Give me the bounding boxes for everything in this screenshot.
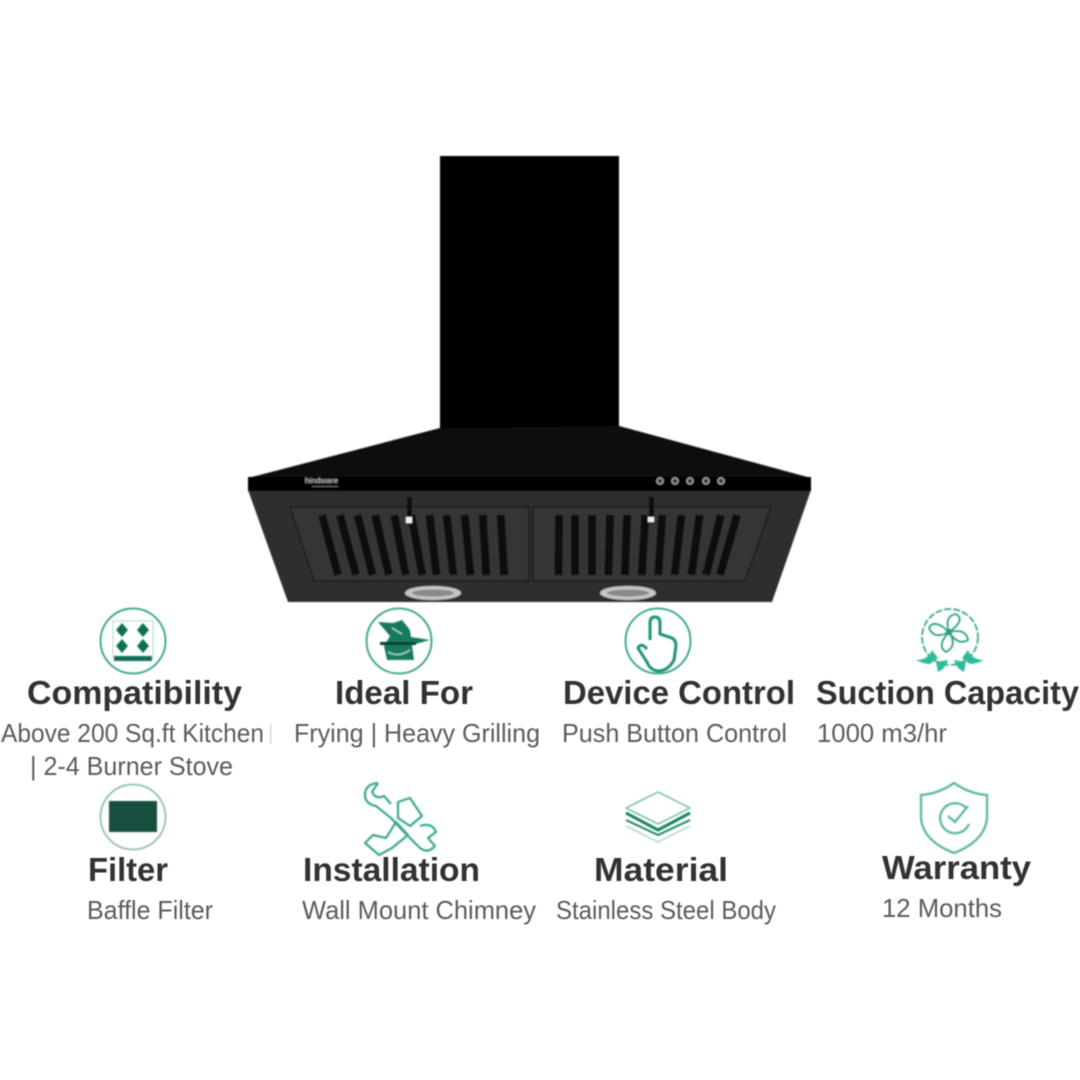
- filter handles: [406, 497, 654, 523]
- control buttons: [657, 478, 724, 484]
- control band: [248, 477, 811, 491]
- text: filter value: Baffle Filter: [87, 895, 213, 925]
- canopy: [248, 426, 811, 478]
- brand logo: hindware: [305, 478, 338, 485]
- heading: warranty: Warranty: [882, 849, 1032, 886]
- text: warranty value: 12 Months: [882, 893, 1002, 923]
- icon: installation tools: [365, 783, 436, 855]
- lower body: [248, 490, 811, 602]
- heading: installation: Installation: [303, 851, 480, 888]
- icon: gas stove: [100, 608, 166, 674]
- heading: device control: Device Control: [563, 674, 795, 711]
- heading: compatibility: Compatibility: [27, 674, 243, 711]
- heading: material: Material: [594, 851, 728, 888]
- right baffle filter: [533, 507, 771, 581]
- text: ideal for value: Frying | Heavy Grilling: [294, 718, 540, 748]
- heading: ideal for: Ideal For: [335, 674, 473, 711]
- icon: filter: [100, 784, 166, 850]
- text: compatibility value: [1, 718, 272, 781]
- text: compatibility value: Above 200 Sq.ft Kitchen: [1, 718, 264, 748]
- icon: warranty shield: [921, 783, 987, 853]
- icon: frying and grilling: [366, 608, 432, 674]
- text: suction value: 1000 m3/hr: [817, 718, 947, 748]
- product: black chimney hood: [248, 156, 811, 602]
- icon: push button hand: [626, 608, 690, 674]
- left baffle filter: [290, 507, 529, 581]
- brand logo: [305, 478, 338, 487]
- text: installation value: Wall Mount Chimney: [302, 895, 536, 925]
- heading: filter: Filter: [88, 851, 168, 888]
- text: device control value: Push Button Control: [562, 718, 787, 748]
- text: compatibility value: | 2-4 Burner Stove: [30, 751, 233, 781]
- heading: suction capacity: Suction Capacity: [816, 674, 1080, 711]
- icon: suction fan: [916, 609, 984, 672]
- lights: [405, 586, 656, 600]
- icon: material layers: [626, 792, 690, 842]
- chimney tower: [440, 156, 619, 491]
- text: material value: Stainless Steel Body: [556, 895, 776, 925]
